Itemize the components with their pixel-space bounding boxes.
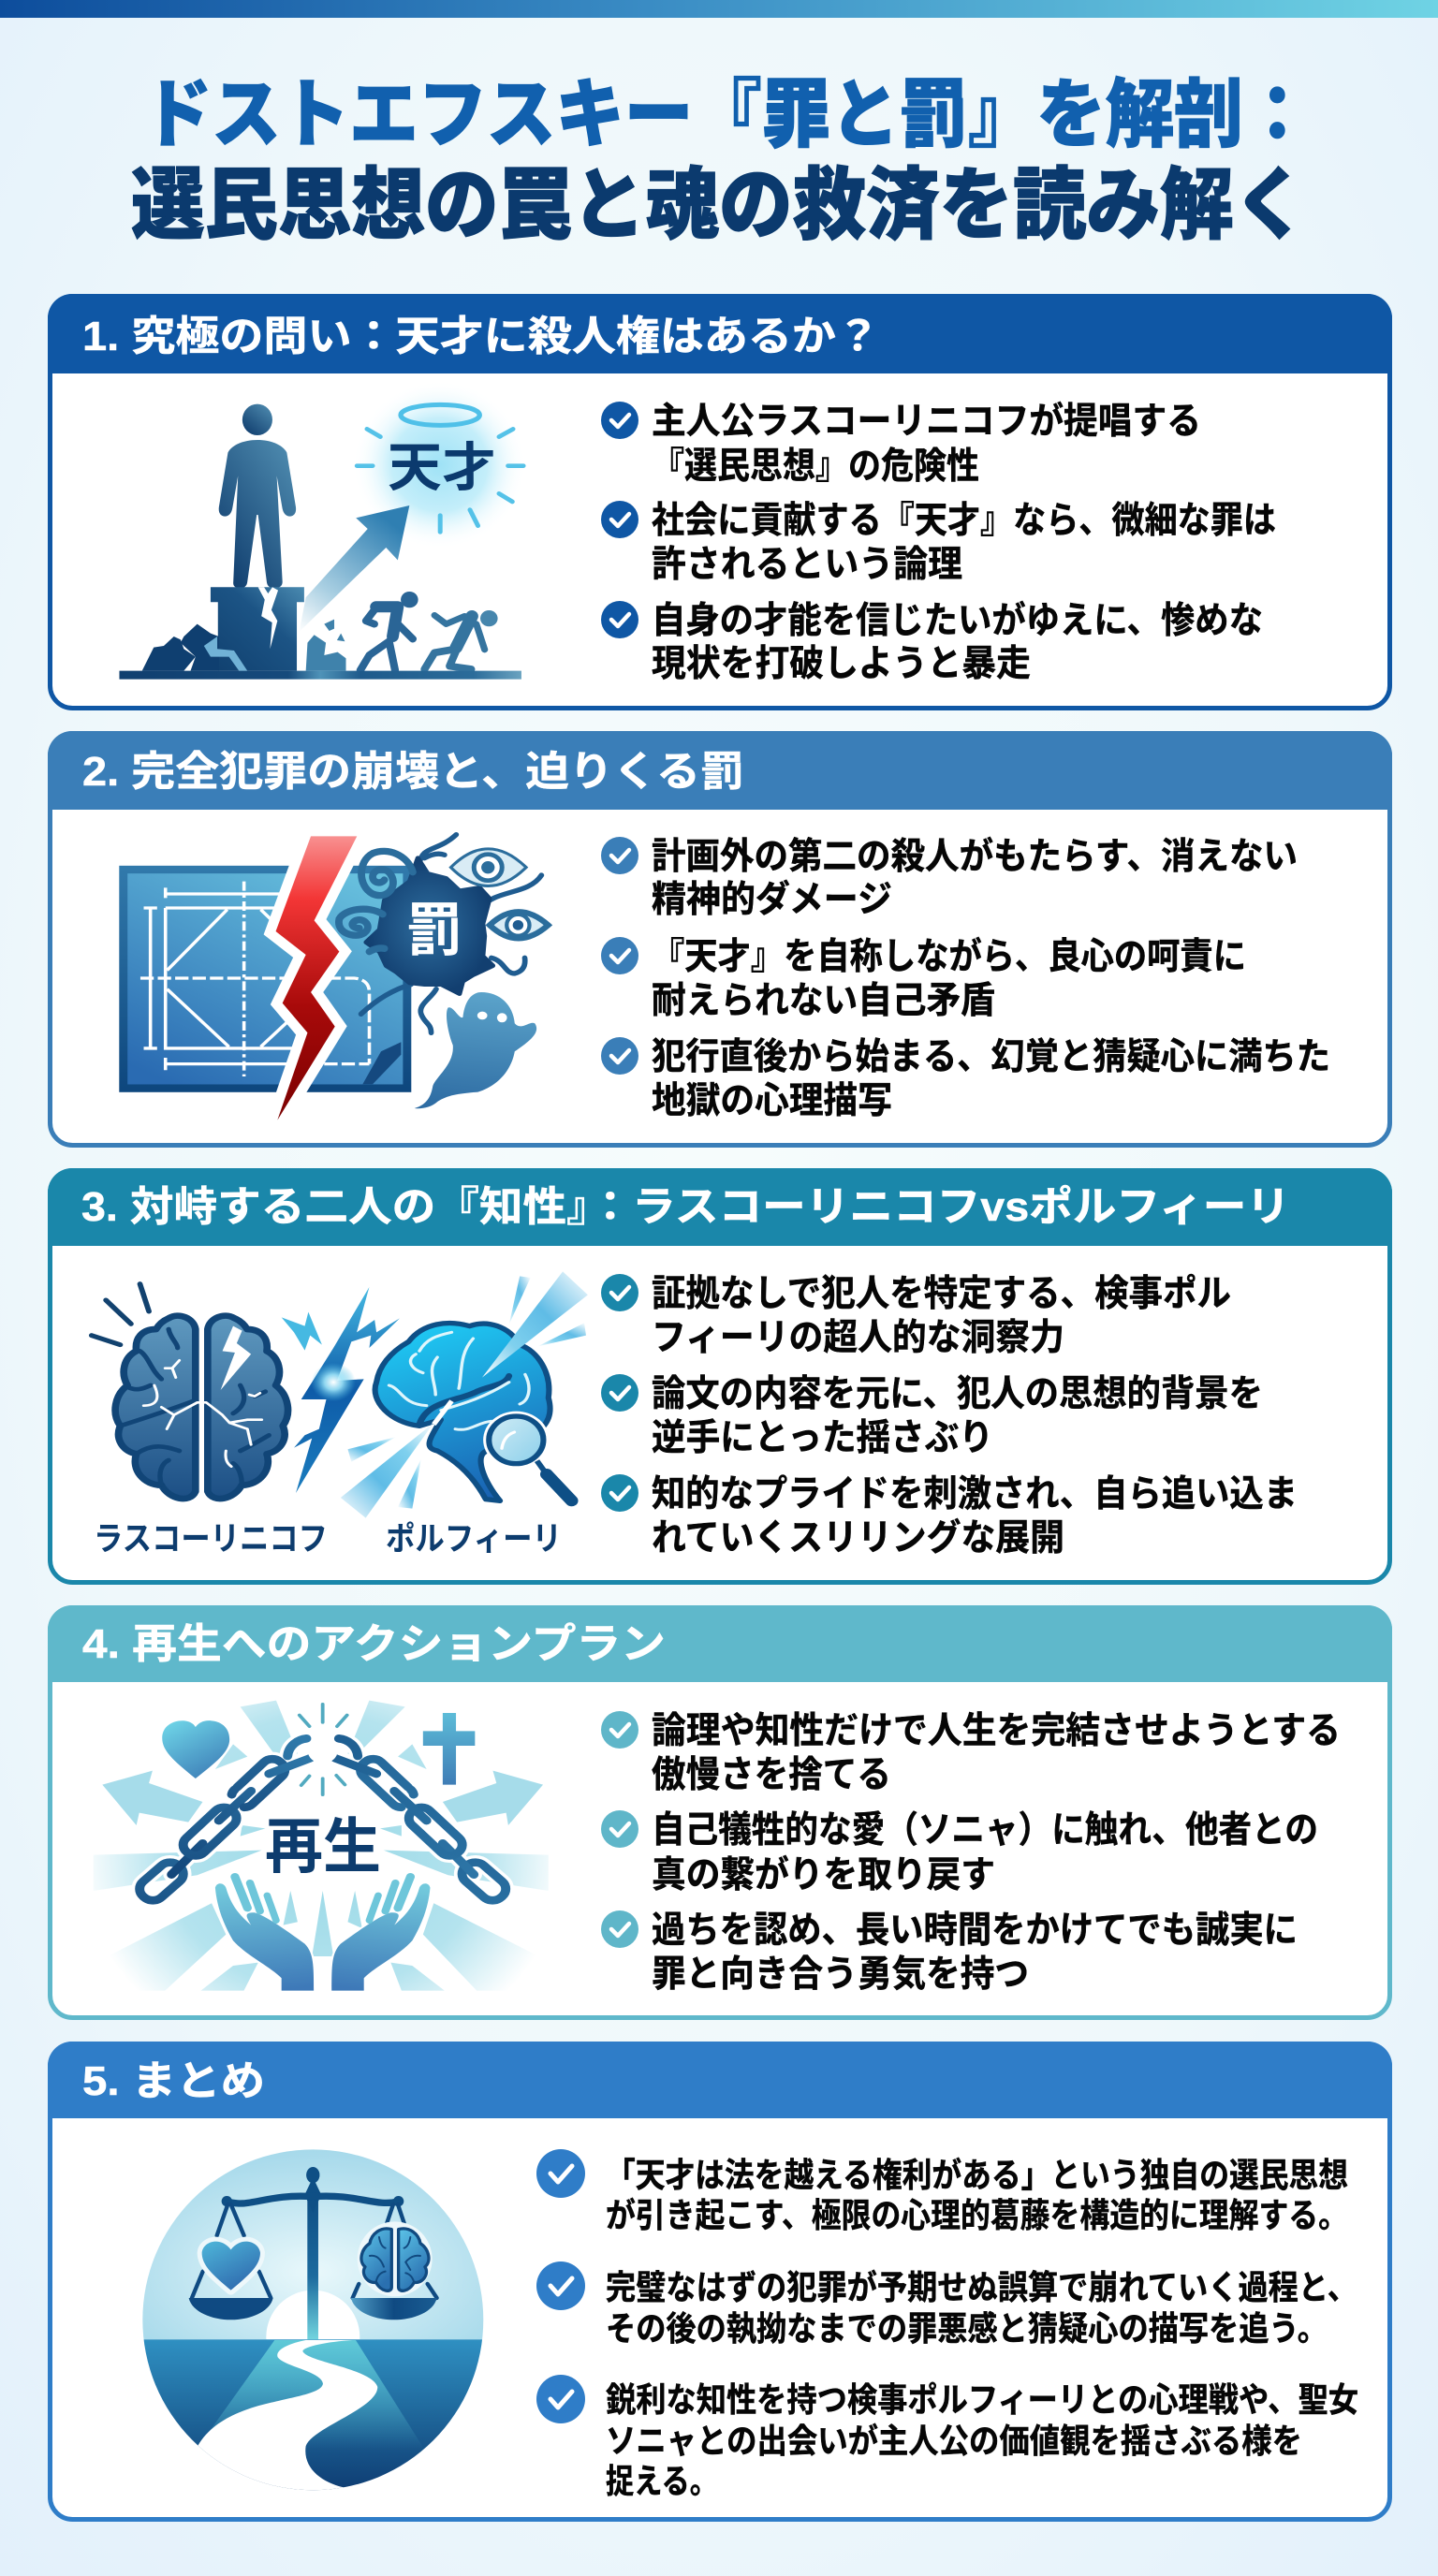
bullet 5-1	[536, 2149, 1348, 2234]
bullet 3-1: 証拠なしで犯人を特定する、検事ポル	[652, 1274, 1231, 1314]
bullet 4-3: 罪と向き合う勇気を持つ	[652, 1954, 1029, 1995]
heading 5: 5. まとめ	[82, 2058, 265, 2104]
top gradient bar	[0, 0, 1438, 18]
brain label: Porfiry: ポルフィーリ	[386, 1521, 562, 1558]
bullet 1-3	[601, 601, 1263, 684]
bullet 2-3: 地獄の心理描写	[652, 1081, 892, 1121]
bullet 4-1: 傲慢さを捨てる	[652, 1755, 891, 1795]
bullet 2-3: 犯行直後から始まる、幻覚と猜疑心に満ちた	[652, 1037, 1330, 1077]
illustration: broken chains and open hands	[94, 1701, 549, 1991]
bullet 2-2	[601, 937, 1246, 1021]
bullet 1-1: 主人公ラスコーリニコフが提唱する	[652, 402, 1201, 442]
bullet 1-2: 社会に貢献する『天才』なら、微細な罪は	[652, 501, 1276, 541]
bullet 5-2	[536, 2261, 1357, 2348]
bullet 3-3: 知的なプライドを刺激され、自ら追い込ま	[652, 1474, 1298, 1515]
bullet 1-3: 現状を打破しようと暴走	[652, 644, 1031, 684]
bullet 5-3: 捉える。	[606, 2462, 718, 2500]
bullet 1-2: 許されるという論理	[652, 545, 962, 585]
bullet 4-2: 自己犠牲的な愛（ソニャ）に触れ、他者との	[652, 1810, 1318, 1851]
bullet 1-2	[601, 501, 1276, 585]
bullet 3-3: れていくスリリングな展開	[652, 1518, 1064, 1559]
panel: 1 ultimate question	[48, 294, 1392, 708]
brain label: Raskolnikov: ラスコーリニコフ	[94, 1521, 328, 1558]
bullet 2-2: 耐えられない自己矛盾	[652, 981, 995, 1021]
bullet 4-2: 真の繋がりを取り戻す	[652, 1855, 995, 1895]
bullet 2-1: 精神的ダメージ	[652, 880, 892, 920]
bullet 5-1: 「天才は法を越える権利がある」という独自の選民思想	[606, 2156, 1348, 2194]
bullet 3-1: フィーリの超人的な洞察力	[652, 1318, 1064, 1358]
bullet 5-2: 完璧なはずの犯罪が予期せぬ誤算で崩れていく過程と、	[606, 2268, 1357, 2306]
bullet 3-1	[601, 1274, 1231, 1358]
panel: 5 summary	[48, 2042, 1392, 2520]
bullet 2-1: 計画外の第二の殺人がもたらす、消えない	[652, 837, 1298, 877]
tentacles	[361, 835, 541, 1032]
bullet 3-3	[601, 1474, 1298, 1559]
heading 4: 4. 再生へのアクションプラン	[82, 1621, 666, 1667]
heading 1: 1. 究極の問い：天才に殺人権はあるか？	[82, 314, 880, 359]
illustration: scales of heart and brain over a winding road	[140, 2146, 487, 2502]
bullet 4-2	[601, 1810, 1318, 1895]
illustration: two brains clash	[92, 1271, 588, 1518]
bullet 1-3: 自身の才能を信じたいがゆえに、惨めな	[652, 601, 1263, 641]
illustration: figure on cracked pedestal reaching for genius	[119, 381, 526, 680]
bullet 2-2: 『天才』を自称しながら、良心の呵責に	[652, 937, 1246, 977]
bullet 4-1: 論理や知性だけで人生を完結させようとする	[652, 1711, 1341, 1751]
panel: 3 two intellects	[48, 1168, 1392, 1582]
bullet 4-3	[601, 1910, 1298, 1995]
bullet 5-1: が引き起こす、極限の心理的葛藤を構造的に理解する。	[606, 2196, 1348, 2234]
bullet 2-1	[601, 837, 1298, 920]
label: genius: 天才	[388, 438, 496, 497]
title: 選民思想の罠と魂の救済を読み解く	[131, 161, 1307, 249]
title: ドストエフスキー『罪と罰』を解剖：	[143, 73, 1312, 156]
label: punishment: 罰	[406, 899, 462, 963]
heading 3: 3. 対峙する二人の『知性』：ラスコーリニコフvsポルフィーリ	[81, 1184, 1290, 1230]
bullet 2-3	[601, 1037, 1330, 1121]
bullet 5-3: 鋭利な知性を持つ検事ポルフィーリとの心理戦や、聖女	[606, 2380, 1358, 2419]
bullet 4-3: 過ちを認め、長い時間をかけてでも誠実に	[652, 1910, 1298, 1951]
panel: 2 collapse of the perfect crime	[48, 731, 1392, 1146]
bullet 4-1	[601, 1711, 1341, 1795]
bullet 5-2: その後の執拗なまでの罪悪感と猜疑心の描写を追う。	[606, 2309, 1328, 2348]
bullet 3-2: 論文の内容を元に、犯人の思想的背景を	[652, 1374, 1263, 1414]
bullet 3-2: 逆手にとった揺さぶり	[652, 1418, 993, 1458]
panel: 4 action plan for rebirth	[48, 1605, 1392, 2018]
label: rebirth: 再生	[265, 1813, 381, 1881]
bullet 5-3: ソニャとの出会いが主人公の価値観を揺さぶる様を	[606, 2422, 1302, 2460]
heading 2: 2. 完全犯罪の崩壊と、迫りくる罰	[82, 749, 744, 795]
bullet 3-2	[601, 1374, 1263, 1458]
title	[131, 73, 1312, 249]
bullet 1-1: 『選民思想』の危険性	[652, 446, 979, 487]
bullet 1-1	[601, 402, 1201, 487]
bullet 5-3	[536, 2375, 1358, 2500]
illustration: shattered blueprint and punishment monster	[124, 835, 549, 1120]
